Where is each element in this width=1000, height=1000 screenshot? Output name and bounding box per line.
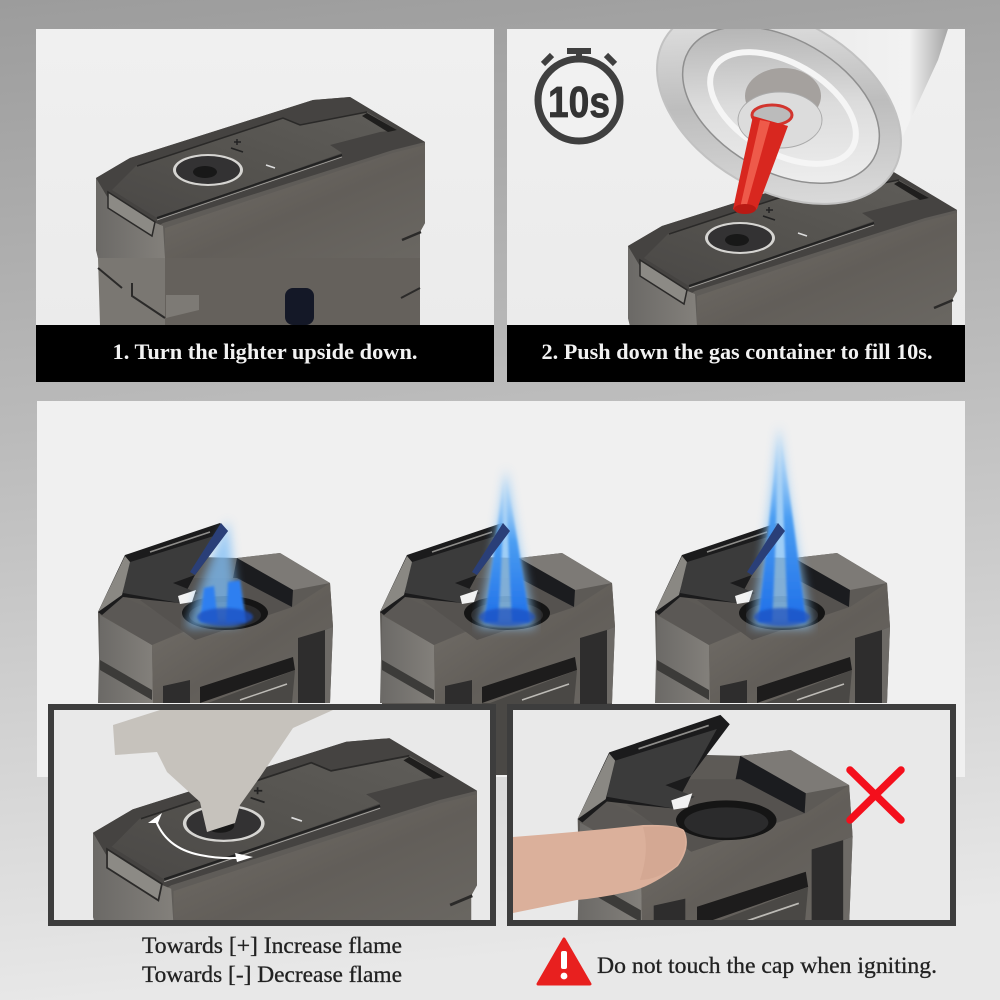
step 1 caption (36, 325, 494, 382)
lighter with finger touching cap (513, 715, 853, 926)
panel: step 1 turn the lighter upside down (36, 29, 494, 382)
panel: do not touch inset (510, 707, 953, 926)
flame adjustment text: Towards [+] Increase flame (142, 933, 402, 958)
panel: flame adjustment inset (51, 707, 493, 926)
flame adjustment text: Towards [-] Decrease flame (142, 962, 402, 987)
icon: red cross (850, 770, 901, 820)
lighter with medium flame (380, 468, 615, 775)
step 2 caption (507, 325, 965, 382)
icon: 10s stopwatch (538, 48, 620, 141)
step 1 caption: 1. Turn the lighter upside down. (112, 339, 418, 364)
lighter upside down, step 1 (96, 97, 425, 325)
icon: 10s stopwatch: 10s (548, 78, 610, 127)
panel: three flame heights (37, 401, 965, 777)
warning text: Do not touch the cap when igniting. (597, 953, 937, 978)
lighter with large flame (655, 425, 890, 703)
lighter and gas can, step 2 (628, 29, 957, 325)
lighter with small flame (98, 520, 333, 703)
lighter with adjustment tool (93, 710, 477, 926)
step 2 caption: 2. Push down the gas container to fill 10s. (542, 339, 932, 364)
flame adjustment text (142, 933, 402, 987)
panel: step 2 push down the gas container (507, 0, 965, 382)
icon: warning triangle (538, 939, 590, 984)
